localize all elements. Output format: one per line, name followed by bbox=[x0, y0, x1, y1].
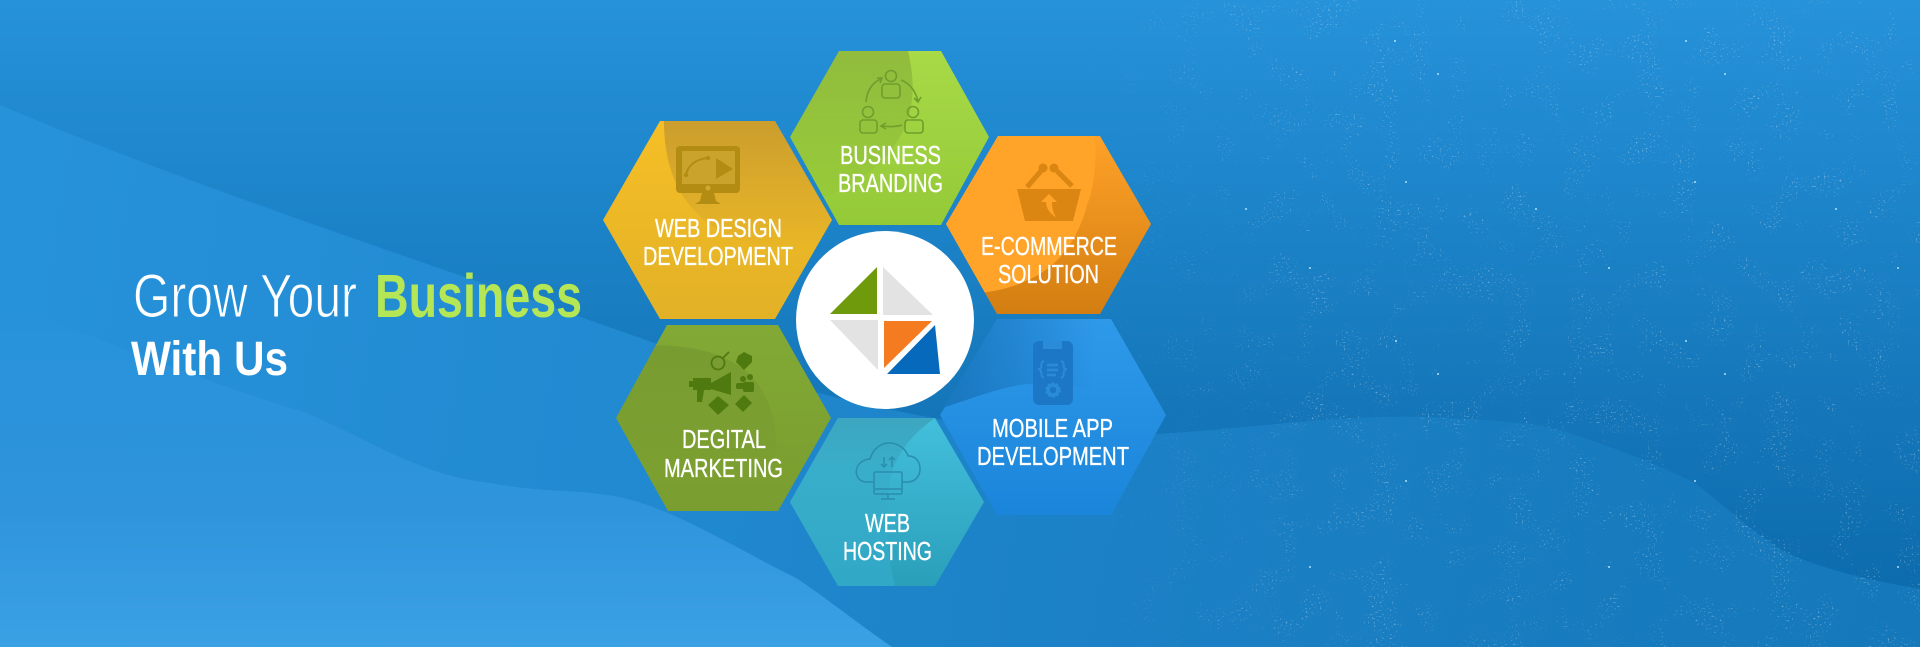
label: DEGITAL bbox=[682, 424, 766, 454]
logo: lower grey triangle bbox=[830, 320, 878, 370]
label bbox=[643, 213, 793, 271]
label: WEB bbox=[865, 508, 910, 538]
heading bbox=[131, 262, 582, 386]
label: E-COMMERCE bbox=[981, 231, 1117, 261]
center logo badge bbox=[796, 231, 974, 409]
heading line: Grow Your: Grow Your bbox=[133, 262, 357, 330]
label: BUSINESS bbox=[840, 140, 941, 170]
panel: e-commerce solution bbox=[946, 136, 1151, 314]
heading line: With Us: With Us bbox=[131, 333, 288, 386]
logo: blue shape bbox=[887, 325, 940, 374]
panel: business branding bbox=[780, 51, 989, 225]
label bbox=[977, 413, 1129, 471]
label bbox=[838, 140, 943, 198]
icon: monitor with cursor bbox=[676, 146, 740, 204]
icon: team cycle bbox=[860, 70, 923, 133]
label: DEVELOPMENT bbox=[643, 241, 793, 271]
icon: megaphone and marketing glyphs bbox=[689, 352, 754, 415]
panel: web design development bbox=[603, 121, 832, 319]
label: MOBILE APP bbox=[992, 413, 1113, 443]
label: BRANDING bbox=[838, 168, 943, 198]
icon: cloud hosting bbox=[856, 443, 920, 499]
label: DEVELOPMENT bbox=[977, 441, 1129, 471]
panel: web hosting bbox=[780, 418, 984, 586]
label: WEB DESIGN bbox=[655, 213, 782, 243]
background: speckle texture bbox=[1050, 0, 1920, 647]
heading highlight: Business: Business bbox=[375, 262, 582, 330]
label bbox=[843, 508, 932, 566]
logo: upper grey triangle bbox=[883, 267, 933, 315]
label bbox=[981, 231, 1117, 289]
background: lighter lower-left wave bbox=[0, 300, 892, 647]
icon: shopping basket bbox=[1017, 164, 1081, 221]
label: SOLUTION bbox=[998, 259, 1099, 289]
icon: phone with gear bbox=[1033, 341, 1073, 405]
background: bright specks bbox=[1245, 40, 1899, 568]
panel: digital marketing bbox=[610, 325, 831, 511]
logo: green triangle bbox=[830, 267, 877, 314]
panel: mobile app development bbox=[940, 319, 1166, 515]
label: MARKETING bbox=[664, 453, 783, 483]
label: HOSTING bbox=[843, 536, 932, 566]
logo: orange triangle bbox=[884, 321, 932, 368]
label bbox=[664, 424, 783, 483]
